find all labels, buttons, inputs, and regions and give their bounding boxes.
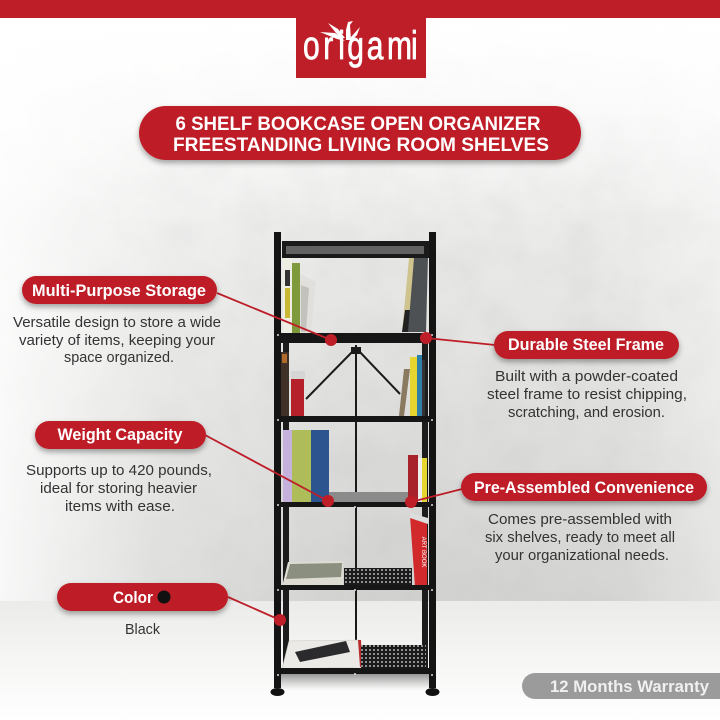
frame posts: [274, 232, 281, 688]
description: Versatile design to store a wide: [13, 314, 221, 331]
top red band: [0, 0, 720, 18]
books third shelf: [283, 430, 427, 502]
magazines and art book: [282, 513, 428, 587]
title text: 6 SHELF BOOKCASE OPEN ORGANIZER: [176, 113, 540, 135]
centre pole: [355, 345, 357, 667]
bookcase product: [270, 232, 440, 696]
warranty badge: [522, 673, 720, 699]
callout: Color: Color: [113, 589, 154, 607]
description: Built with a powder-coated: [495, 368, 678, 385]
warranty badge: 12 Months Warranty: [550, 678, 710, 696]
description: Black: [125, 621, 160, 638]
rivets: [277, 334, 433, 676]
callout: Pre-Assembled Convenience: [405, 473, 707, 564]
callout: Durable Steel Frame: [420, 331, 687, 421]
callout: Pre-Assembled Convenience: Pre-Assembled Convenience: [474, 479, 694, 497]
description: scratching, and erosion.: [508, 404, 665, 421]
description: steel frame to resist chipping,: [487, 386, 687, 403]
magazines and art book: ART BOOK: [420, 537, 426, 567]
callout: Durable Steel Frame: Durable Steel Frame: [508, 336, 664, 354]
color swatch: [158, 590, 170, 604]
callout: Multi-Purpose Storage: [13, 276, 337, 366]
books top shelf: [283, 256, 428, 333]
callout: Color: [57, 583, 286, 638]
callout: Multi-Purpose Storage: Multi-Purpose Storage: [32, 282, 206, 300]
description: items with ease.: [65, 498, 175, 515]
callout: Weight Capacity: Weight Capacity: [58, 426, 183, 444]
floor: [0, 601, 720, 720]
description: your organizational needs.: [495, 547, 669, 564]
books second shelf: [281, 352, 425, 416]
callout: Weight Capacity: [26, 421, 334, 515]
title text: FREESTANDING LIVING ROOM SHELVES: [173, 134, 549, 156]
description: Supports up to 420 pounds,: [26, 462, 212, 479]
logo wordmark: origami: [303, 24, 418, 68]
title pill: [139, 106, 581, 160]
feet: [270, 688, 284, 696]
description: space organized.: [64, 349, 174, 366]
icon: paper crane: [320, 21, 360, 42]
description: Comes pre-assembled with: [488, 511, 672, 528]
description: variety of items, keeping your: [19, 332, 215, 349]
top mesh shelf: [282, 241, 429, 258]
mesh shelf 3: [329, 492, 408, 502]
description: ideal for storing heavier: [40, 480, 197, 497]
description: six shelves, ready to meet all: [485, 529, 675, 546]
logo: origami: [296, 10, 426, 78]
shelf bars: [281, 333, 429, 343]
floor shadow: [281, 674, 429, 690]
bottom shelf items: [282, 640, 426, 669]
inner rear posts: [283, 343, 289, 669]
brace: [306, 350, 400, 399]
